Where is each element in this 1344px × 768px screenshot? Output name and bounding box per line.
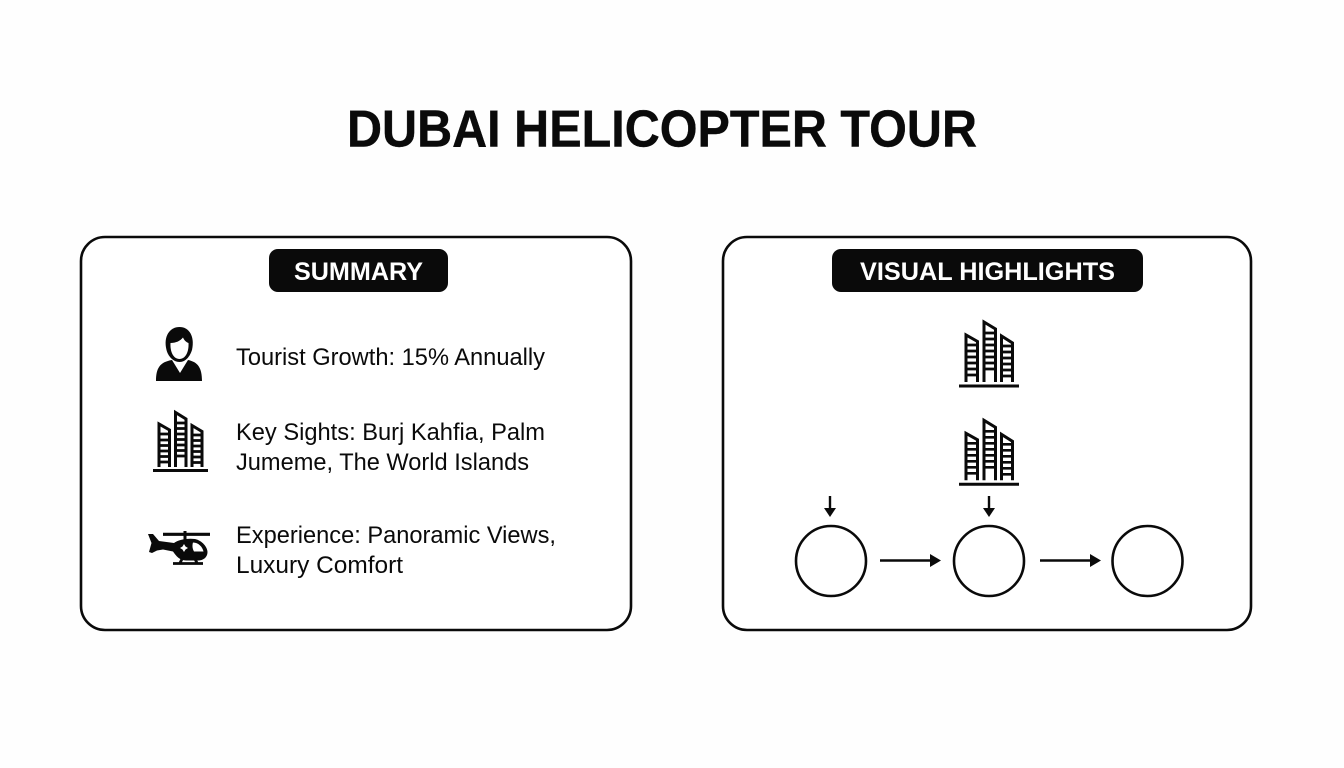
- heading: visual highlights: VISUAL HIGHLIGHTS: [860, 258, 1115, 286]
- panel: visual highlights: [723, 237, 1251, 630]
- heading: summary: [269, 249, 448, 292]
- arrow: down to second circle: [983, 496, 995, 517]
- icon: lower buildings: [959, 420, 1019, 484]
- text: key sights: [236, 419, 545, 476]
- heading: summary: SUMMARY: [294, 258, 423, 286]
- arrow: first to second: [880, 554, 941, 567]
- panel: summary: [81, 237, 631, 630]
- text: key sights: Jumeme, The World Islands: [236, 449, 529, 476]
- text: key sights: Key Sights: Burj Kahfia, Palm: [236, 419, 545, 446]
- icon: buildings: [153, 412, 208, 470]
- icon: upper buildings: [959, 322, 1019, 386]
- circle: first: [796, 526, 866, 596]
- arrow: second to third: [1040, 554, 1101, 567]
- text: experience: Luxury Comfort: [236, 552, 403, 579]
- text: experience: [236, 522, 556, 579]
- circle: third: [1112, 526, 1182, 596]
- text: experience: Experience: Panoramic Views,: [236, 522, 556, 549]
- text: tourist growth: Tourist Growth: 15% Annually: [236, 344, 546, 371]
- heading: visual highlights: [832, 249, 1143, 292]
- circle: second: [954, 526, 1024, 596]
- arrow: down to first circle: [824, 496, 836, 517]
- title: DUBAI HELICOPTER TOUR: [347, 100, 977, 158]
- icon: helicopter: [148, 531, 210, 564]
- icon: person: [156, 327, 202, 381]
